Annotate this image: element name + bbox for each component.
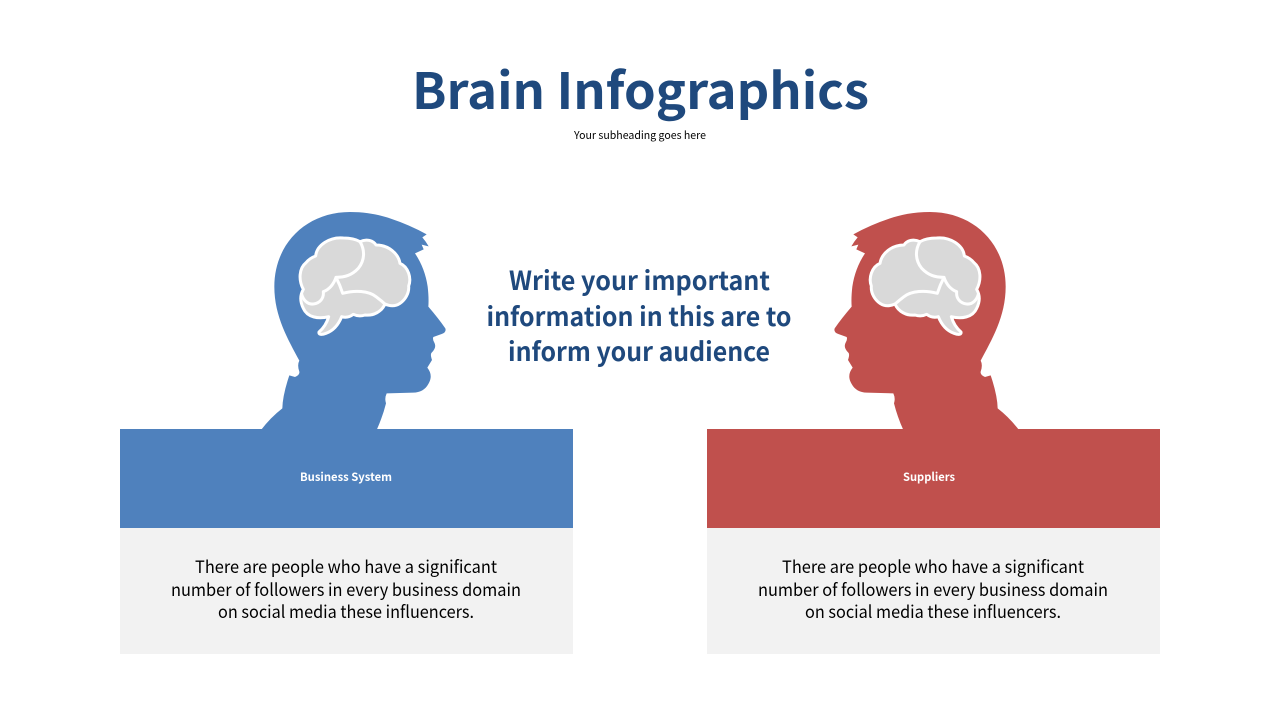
text block: business system description: number of followers in every business domain bbox=[171, 576, 521, 601]
central message: inform your audience bbox=[508, 332, 770, 369]
subheading: Your subheading goes here bbox=[573, 127, 706, 143]
header bar: business system: Business System bbox=[300, 469, 392, 485]
header bar: suppliers bbox=[707, 429, 1160, 528]
text block: business system description: There are people who have a significant bbox=[195, 553, 498, 578]
icon: red head silhouette with brain bbox=[834, 212, 1019, 430]
central message bbox=[486, 261, 792, 369]
text block: suppliers description bbox=[707, 528, 1160, 654]
central message: information in this are to bbox=[486, 297, 792, 334]
icon: blue head silhouette with brain bbox=[261, 212, 446, 430]
header bar: suppliers: Suppliers bbox=[903, 469, 955, 485]
text block: suppliers description: There are people who have a significant bbox=[782, 553, 1085, 578]
title: Brain Infographics bbox=[412, 52, 869, 124]
central message: Write your important bbox=[509, 261, 770, 298]
text block: business system description bbox=[120, 528, 573, 654]
text block: suppliers description: number of followers in every business domain bbox=[758, 576, 1108, 601]
panel: suppliers bbox=[707, 212, 1160, 654]
text block: business system description: on social media these influencers. bbox=[218, 598, 474, 623]
header bar: business system bbox=[120, 429, 573, 528]
panel: business system bbox=[120, 212, 573, 654]
text block: suppliers description: on social media these influencers. bbox=[805, 598, 1061, 623]
